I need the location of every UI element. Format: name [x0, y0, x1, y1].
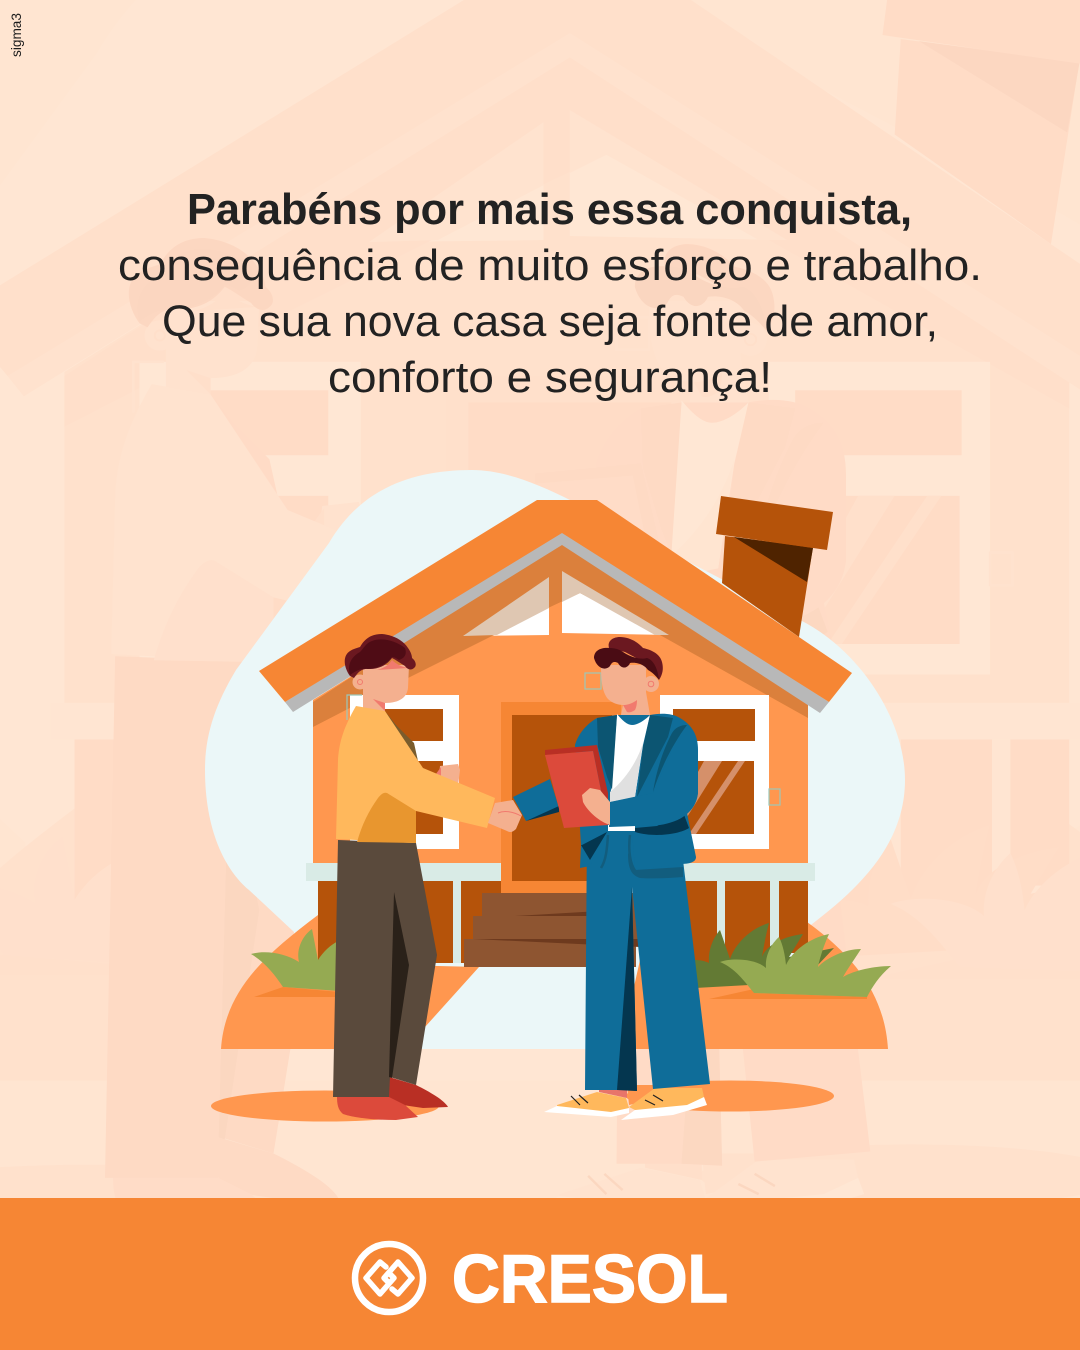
house — [259, 500, 852, 967]
neck and face — [352, 665, 409, 712]
shoes — [337, 1077, 448, 1120]
sleeve — [609, 750, 698, 827]
hair — [345, 634, 416, 678]
left window — [350, 695, 459, 849]
far hand — [433, 764, 460, 786]
message line 4: conforto e segurança! — [328, 353, 772, 402]
belt — [608, 825, 635, 831]
congratulation message — [118, 185, 982, 402]
right bush — [695, 923, 891, 999]
floor shadows — [211, 1080, 834, 1122]
t-shirt — [610, 714, 650, 802]
attic glass reflection — [463, 571, 669, 636]
sigma3 agency mark: sigma3 — [8, 13, 24, 57]
trousers — [333, 840, 437, 1097]
sweater — [336, 706, 495, 843]
trousers — [585, 825, 710, 1091]
left bush — [251, 929, 340, 997]
man in blue suit — [488, 637, 710, 1120]
pocket fold — [628, 853, 683, 878]
thin teal markers — [347, 673, 780, 805]
Cresol logo — [355, 1241, 728, 1317]
ground mounds — [221, 915, 888, 1049]
porch fence — [306, 863, 815, 963]
main illustration: handshake in front of house — [205, 470, 905, 1122]
lapels — [597, 715, 617, 790]
hand on clipboard — [582, 788, 610, 825]
far arm in handshake — [513, 779, 559, 821]
handshake fist — [488, 800, 522, 832]
roof — [259, 500, 852, 702]
chimney — [716, 496, 833, 637]
heading line: Parabéns por mais essa conquista, — [187, 185, 912, 234]
jacket — [575, 714, 698, 878]
light blue blob — [205, 470, 905, 1049]
roof shadow — [313, 540, 808, 727]
message line 2: consequência de muito esforço e trabalho. — [118, 241, 982, 290]
clipboard — [545, 745, 608, 828]
steps — [464, 893, 640, 967]
grey roof trim — [285, 530, 829, 713]
neck and face — [601, 665, 659, 725]
wall — [313, 545, 808, 870]
jacket shadow — [635, 812, 689, 835]
bag strap — [385, 711, 420, 770]
logo wordmark: CRESOL — [452, 1241, 728, 1317]
attic windows — [463, 571, 669, 636]
hair — [594, 637, 663, 680]
jacket seams — [601, 835, 636, 872]
door — [501, 702, 621, 893]
orange footer banner — [0, 1198, 1080, 1350]
man in yellow sweater — [333, 634, 495, 1120]
message line 3: Que sua nova casa seja fonte de amor, — [162, 297, 938, 346]
logo symbol — [355, 1244, 423, 1312]
sneakers — [544, 1085, 707, 1120]
right window — [660, 695, 769, 849]
